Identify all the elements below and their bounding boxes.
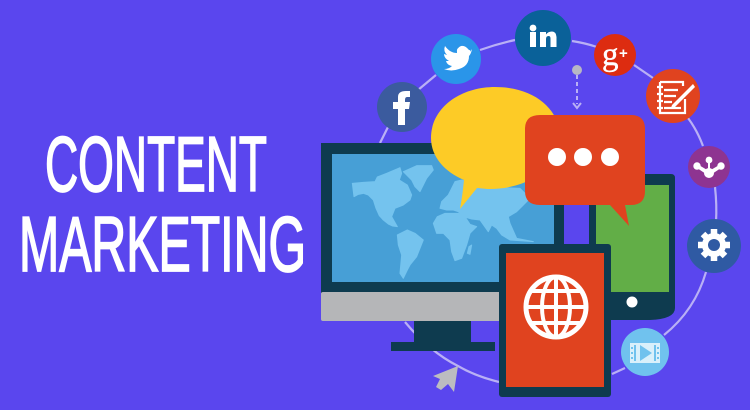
red speech bubble bbox=[525, 115, 645, 226]
phone bbox=[589, 174, 675, 320]
dashed arrow bbox=[572, 65, 582, 108]
tablet screen bbox=[506, 253, 604, 387]
monitor screen with world map bbox=[332, 154, 554, 282]
icon: google plus bbox=[594, 34, 636, 76]
icon: gear bbox=[687, 219, 741, 273]
icon: network nodes bbox=[688, 146, 730, 188]
icon: globe bbox=[526, 277, 586, 337]
tablet bbox=[499, 244, 611, 397]
title: MARKETING bbox=[19, 200, 306, 288]
title: CONTENT bbox=[45, 120, 267, 208]
icon: cursor arrow bbox=[433, 366, 458, 392]
orbit ring bbox=[380, 40, 716, 382]
yellow speech bubble bbox=[431, 87, 560, 209]
icon: google plus: g bbox=[602, 37, 618, 73]
phone screen bbox=[596, 185, 669, 292]
icon: facebook bbox=[377, 82, 427, 132]
icon: video bbox=[621, 328, 669, 376]
monitor base bbox=[391, 342, 495, 351]
icon: twitter bbox=[431, 34, 481, 84]
icon: notepad bbox=[646, 69, 700, 123]
phone button bbox=[626, 296, 638, 308]
monitor chin bbox=[321, 292, 521, 321]
icon: linkedin bbox=[515, 10, 571, 66]
monitor stand bbox=[414, 321, 471, 342]
icon: google plus: + bbox=[619, 45, 628, 62]
monitor bbox=[321, 143, 564, 351]
title bbox=[19, 120, 306, 288]
